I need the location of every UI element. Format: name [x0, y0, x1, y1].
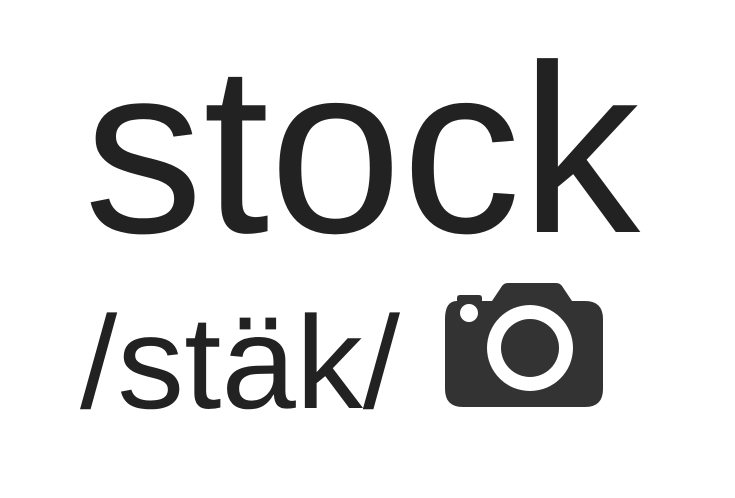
icon: camera — [445, 283, 603, 407]
pronunciation: /stäk/ — [80, 289, 400, 436]
title: stock: stock — [84, 15, 641, 283]
